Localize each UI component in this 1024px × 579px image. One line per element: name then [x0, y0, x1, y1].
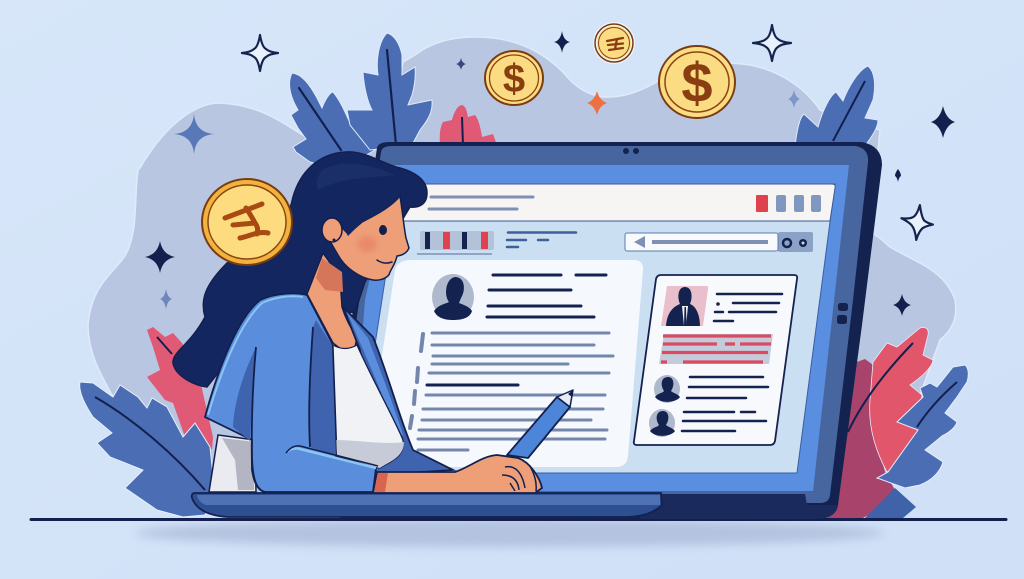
leaf: top centre [347, 33, 432, 150]
window buttons [756, 195, 821, 212]
leaf: top left [290, 73, 375, 170]
star: dark right [931, 106, 955, 138]
top bar text lines [429, 197, 533, 209]
mouth [377, 260, 392, 263]
star: small blue right [788, 90, 800, 108]
cuff shadow [374, 473, 388, 492]
stars [145, 25, 955, 316]
undershirt shade [222, 438, 255, 490]
profile card [634, 275, 797, 445]
toolbar swatches [417, 231, 494, 254]
document background [365, 260, 643, 467]
card lower lines [682, 377, 768, 431]
leaf: lower blue [865, 488, 916, 518]
toolbar text lines [507, 232, 576, 247]
leaf: top right [795, 66, 878, 146]
coin: large dollar [659, 46, 735, 118]
hair: back [173, 152, 427, 387]
jacket: back fold [233, 347, 256, 441]
pencil [507, 390, 573, 458]
neck shadow [316, 258, 343, 292]
laptop: blue bezel [350, 165, 849, 491]
base: dark hinge [640, 494, 838, 519]
star: dark lower right [893, 294, 911, 316]
laptop: screen [355, 184, 835, 473]
jacket: forearm outline [286, 446, 378, 466]
blush [357, 236, 377, 252]
document bold line [427, 384, 518, 386]
hair: highlight [317, 164, 395, 190]
leaf veins: right [848, 343, 957, 432]
leaves: top [290, 33, 878, 170]
coin: large dollar: $ [681, 51, 713, 114]
laptop [192, 142, 882, 519]
leaf: red [870, 327, 933, 472]
star: tiny top [456, 58, 466, 70]
ground line [31, 518, 1006, 521]
star: blue left [174, 114, 214, 154]
jacket: shoulder highlight [208, 296, 303, 415]
shirt [333, 345, 403, 468]
star: dark left [145, 241, 175, 273]
base: tray [192, 493, 662, 517]
leaf: blue left [80, 382, 215, 517]
jacket: right lapel [347, 312, 403, 438]
star: tiny right [895, 169, 901, 182]
jacket: body and sleeve [205, 293, 376, 492]
browser top bar [400, 184, 835, 221]
star: dark top [554, 31, 570, 53]
finger lines [502, 466, 536, 491]
hair: ear wisp [322, 196, 400, 236]
document margin dashes [410, 334, 423, 428]
laptop: outer frame [340, 142, 882, 519]
coin: left [202, 179, 292, 265]
leaf veins: left [95, 337, 205, 490]
document body lines [418, 333, 613, 450]
card bullet [716, 302, 720, 306]
document heading lines [487, 275, 606, 317]
forearm and hand [373, 455, 542, 493]
card photo [661, 286, 708, 326]
address bar [625, 232, 813, 252]
star: small blue left [160, 289, 172, 309]
card avatar 1 [654, 375, 680, 403]
coin: small [595, 24, 633, 62]
leaves: lower right [826, 327, 968, 518]
leaf vein: top right [833, 81, 865, 141]
leaf vein: top pink [462, 117, 463, 145]
undershirt [209, 435, 256, 492]
eye [379, 225, 387, 235]
leaf: dark red [826, 359, 895, 518]
jacket: right panel [343, 307, 453, 475]
document avatar [432, 274, 474, 320]
leaf veins: top left [299, 50, 396, 150]
jacket: front fold [309, 320, 336, 456]
star: orange [587, 91, 607, 115]
card text lines [714, 294, 782, 321]
star: outline top left [242, 35, 278, 71]
laptop: mid bezel [345, 146, 868, 503]
card background [634, 275, 797, 445]
star: outline top right [753, 25, 791, 61]
coin: medium dollar [485, 51, 543, 105]
jacket: fold lines [252, 327, 313, 492]
laptop: side buttons [837, 303, 848, 324]
woman [173, 152, 542, 493]
card highlight box [659, 334, 773, 364]
coin: medium dollar: $ [503, 57, 525, 101]
leaf: blue right [877, 365, 968, 488]
laptop base [192, 493, 838, 519]
blob: background shape [88, 37, 956, 505]
leaves: lower left [80, 327, 215, 517]
ear [322, 218, 342, 242]
star: outline right [899, 203, 935, 241]
face [327, 196, 409, 280]
document panel [365, 260, 643, 467]
ground shadow [135, 519, 885, 547]
laptop: webcam [623, 148, 639, 154]
card avatar 2 [649, 409, 675, 437]
neck [307, 253, 357, 350]
earring [332, 238, 336, 242]
shirt shadow [336, 440, 404, 468]
jacket: forearm highlight [287, 448, 376, 468]
top bar background [400, 184, 835, 221]
leaf: top pink [440, 105, 497, 145]
base: tray highlight [197, 495, 660, 505]
leaf: pink left [147, 327, 213, 450]
